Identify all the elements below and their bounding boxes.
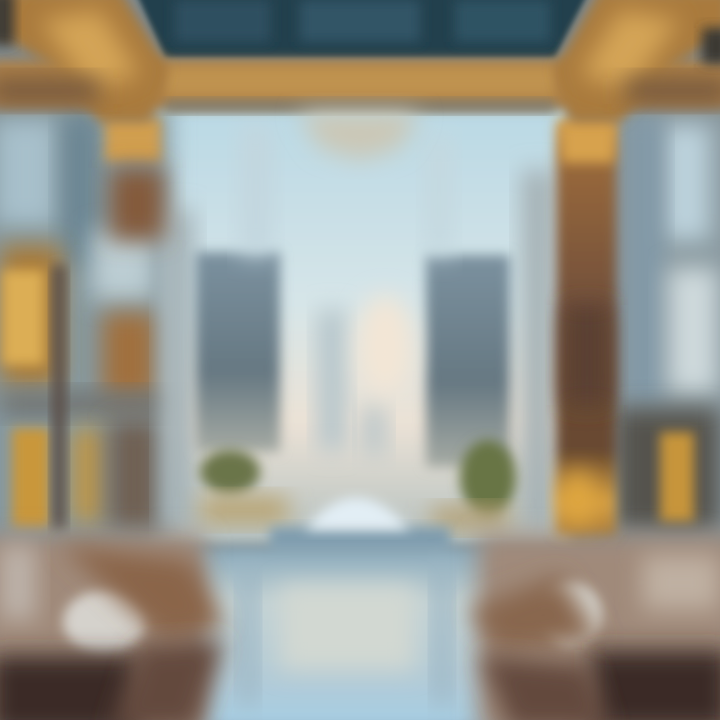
panel: right golden column — [556, 120, 616, 535]
panel: left side glazing and interior — [0, 105, 194, 545]
panel: left golden column top — [105, 118, 164, 240]
panel: right lounge furniture — [470, 535, 720, 720]
icon: planting by the towers — [200, 440, 516, 529]
floor reflection — [280, 585, 415, 670]
panel: golden ceiling beams — [0, 0, 720, 122]
panel: left lounge furniture — [0, 535, 225, 720]
icon: hanging ornament under beam — [298, 112, 420, 160]
icon: distant skyline towers — [196, 125, 510, 467]
sky opening — [150, 105, 570, 545]
panel: right side glazing and interior — [522, 105, 720, 545]
panel: reflective floor — [195, 548, 495, 720]
panel: ceiling glass — [135, 0, 590, 58]
floor pillar reflections — [240, 565, 450, 705]
icon: central white pavilion — [270, 498, 450, 553]
